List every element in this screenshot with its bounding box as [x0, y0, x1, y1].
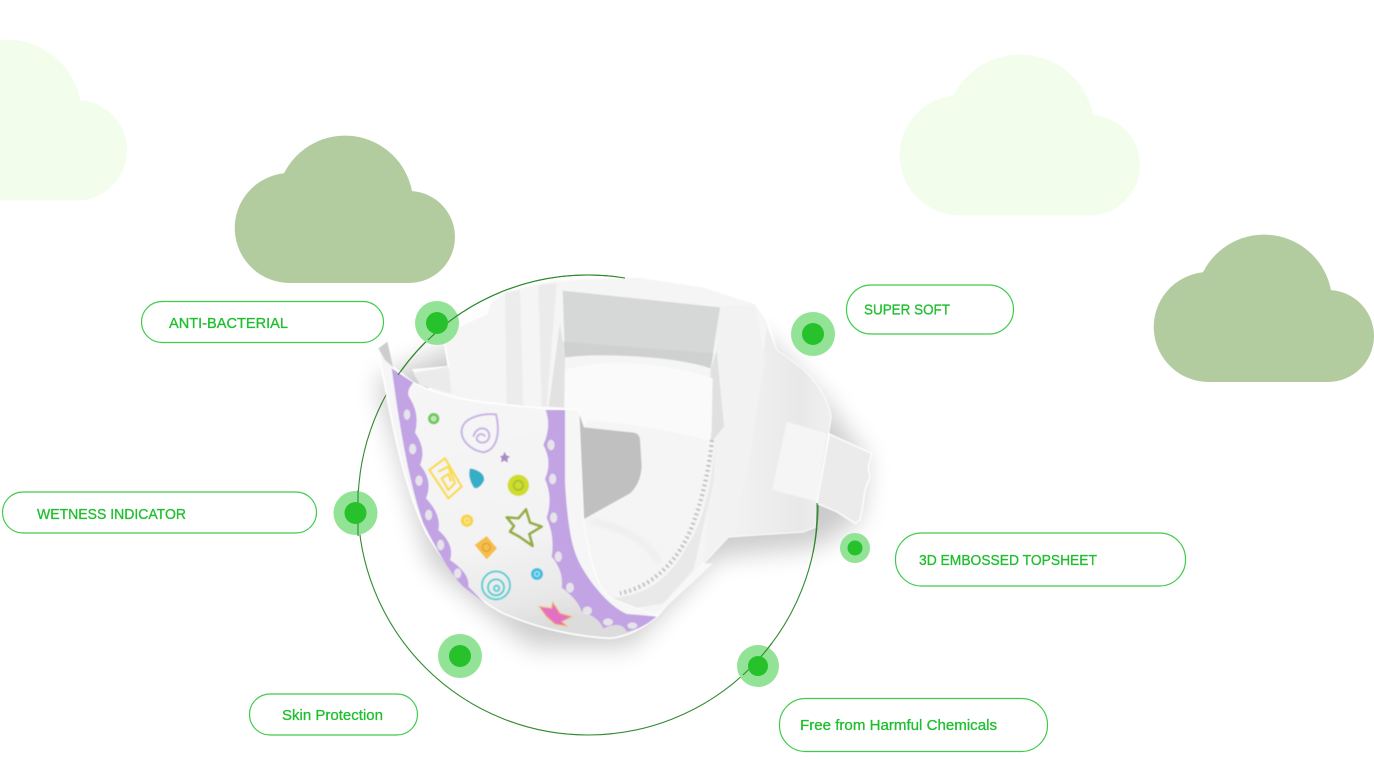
hotspot: 3D embossed topsheet — [840, 533, 870, 563]
print: lilac heart spiral — [462, 414, 498, 452]
cloud: top right pale — [900, 55, 1140, 215]
print: teal spiral — [482, 571, 510, 599]
fastening tape — [817, 434, 872, 523]
cloud: right green — [1154, 235, 1374, 382]
label: wetness indicator: WETNESS INDICATOR — [37, 506, 186, 523]
print: yellow square spiral — [429, 458, 462, 498]
print: yellow swirl — [461, 514, 473, 527]
print: teal drop — [469, 468, 484, 488]
label: skin protection: Skin Protection — [282, 707, 383, 724]
front panel — [378, 342, 657, 638]
cloud: top left pale — [0, 40, 127, 200]
absorbent core — [565, 363, 713, 593]
hotspot: skin protection — [438, 634, 482, 678]
hotspot: super soft — [791, 312, 835, 356]
print: lilac star — [500, 452, 510, 463]
diaper illustration — [377, 277, 872, 647]
label: 3D embossed topsheet — [896, 533, 1186, 586]
cloud: left green — [235, 136, 455, 283]
print: blue swirl — [531, 568, 543, 580]
right purple band — [543, 410, 657, 632]
print: green swirl — [429, 414, 438, 423]
label: free from harmful chemicals — [780, 698, 1048, 752]
orbit circle — [358, 275, 818, 735]
print: orange square — [475, 536, 497, 559]
right wing — [728, 327, 831, 537]
label: 3D embossed topsheet: 3D EMBOSSED TOPSHEET — [919, 552, 1097, 569]
orbit arc over diaper: right — [813, 503, 817, 553]
front ruffle — [565, 410, 657, 617]
label: free from harmful chemicals: Free from Harmful Chemicals — [800, 717, 997, 734]
back left flap inner — [413, 367, 452, 393]
hotspot: wetness indicator — [334, 490, 378, 536]
hotspot: anti-bacterial — [415, 301, 459, 345]
print: olive star — [507, 509, 542, 546]
diaper shadow — [377, 310, 867, 647]
left purple band — [392, 368, 485, 603]
orbit arc over diaper: top left — [398, 275, 625, 375]
grey side patch — [578, 412, 642, 519]
label: anti-bacterial — [142, 302, 384, 342]
label: super soft — [846, 285, 1014, 334]
diaper back body — [413, 277, 831, 617]
waist panel — [703, 305, 765, 563]
fastening patch — [772, 422, 827, 502]
label: super soft: SUPER SOFT — [864, 302, 950, 318]
print: pink star — [539, 602, 572, 626]
label: skin protection — [250, 694, 418, 735]
label: anti-bacterial: ANTI-BACTERIAL — [169, 315, 288, 332]
grey waistband — [563, 291, 720, 368]
leg cuff elastic — [610, 437, 716, 610]
print: lime circle — [508, 475, 529, 496]
scallop dots — [404, 409, 637, 629]
label: wetness indicator — [2, 492, 316, 533]
hotspot: free from harmful chemicals — [737, 643, 779, 687]
